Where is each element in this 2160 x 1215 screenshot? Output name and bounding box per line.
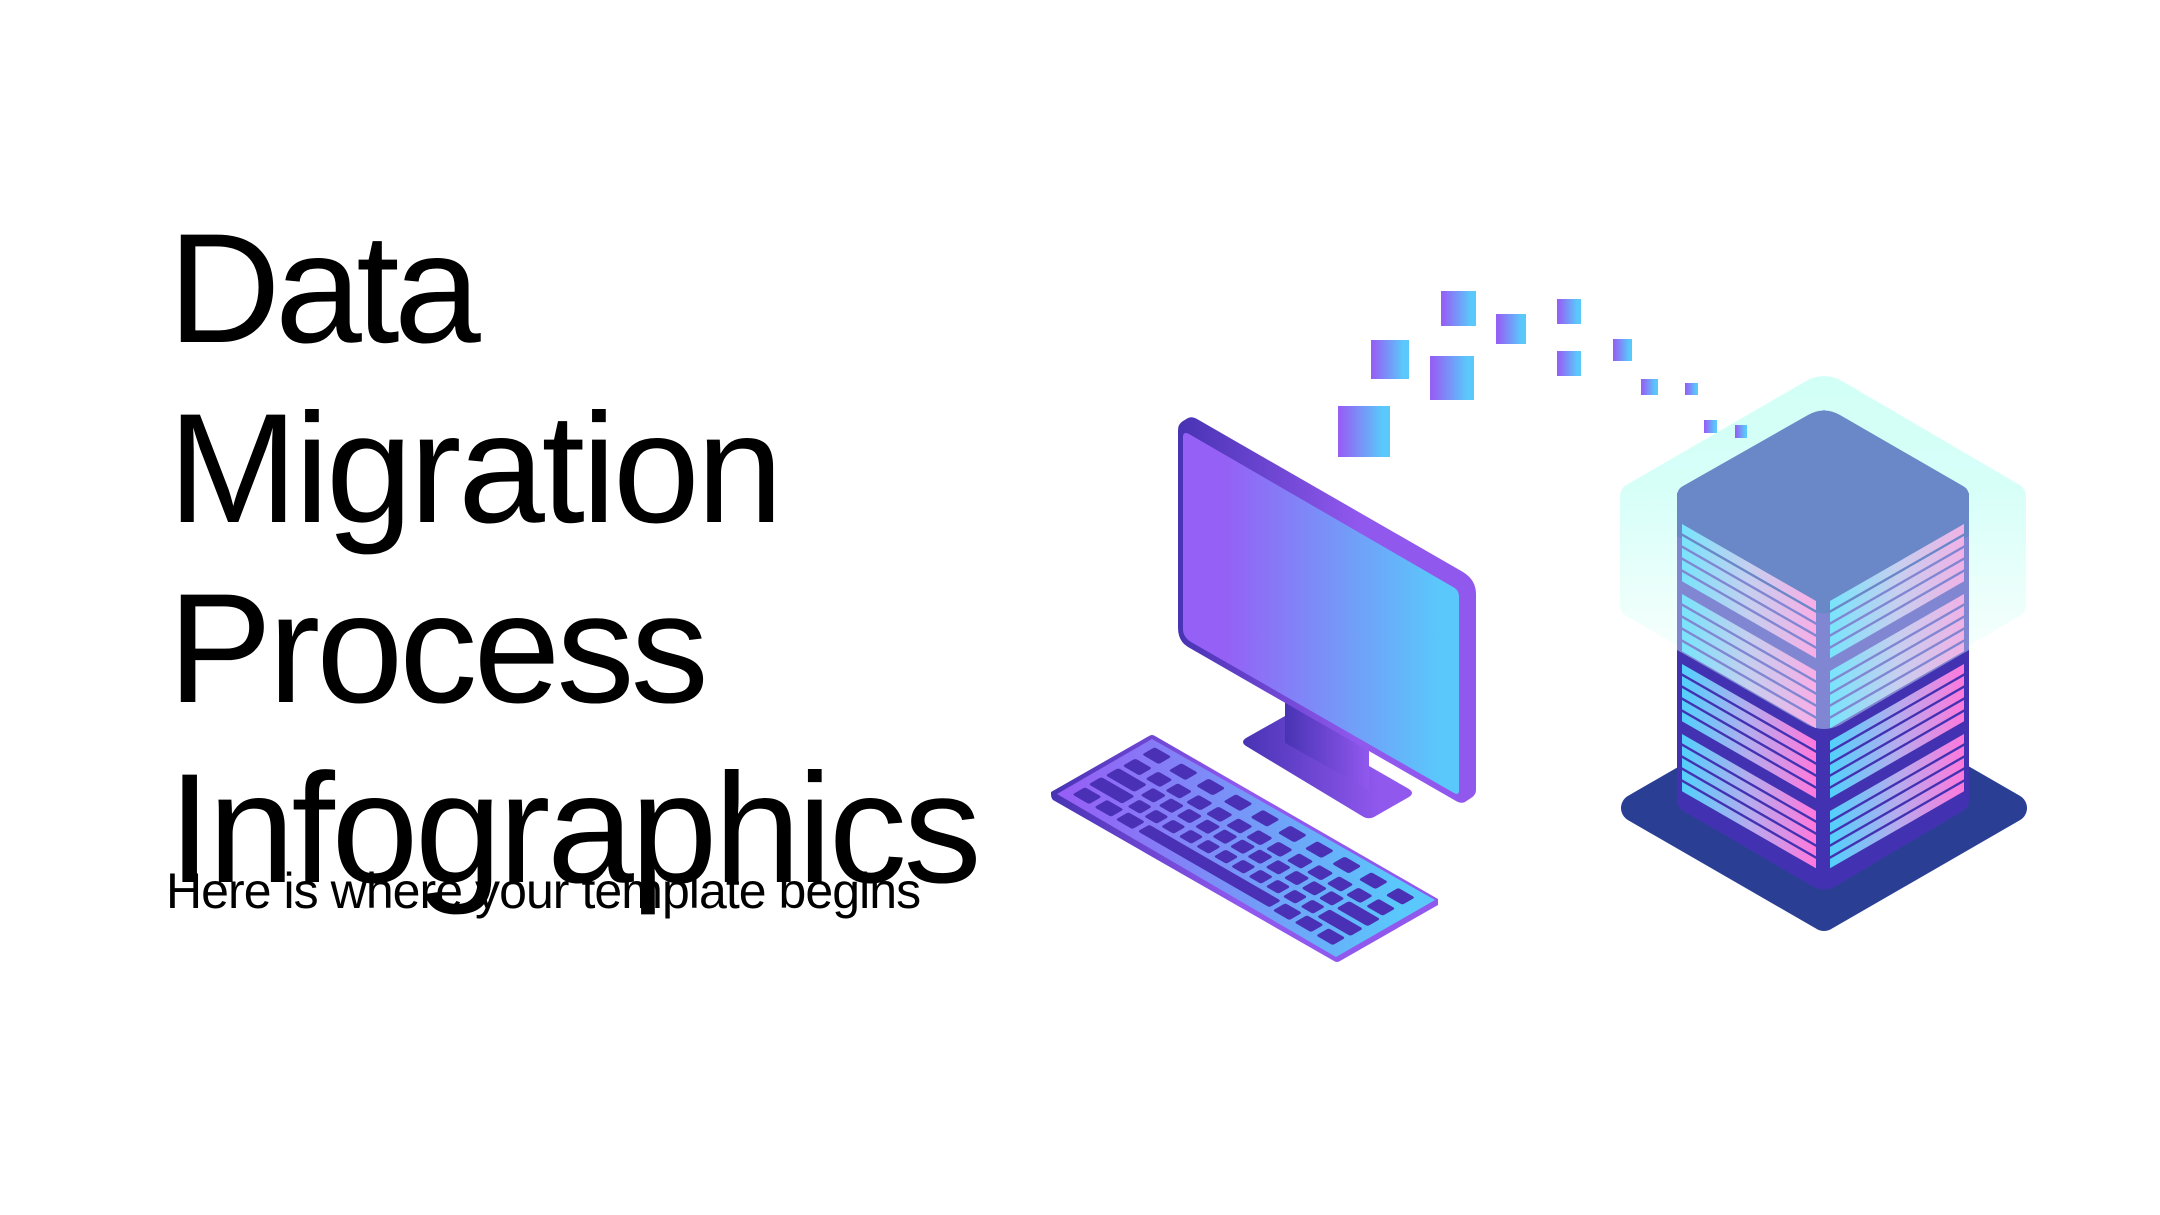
title: Infographics	[168, 742, 978, 916]
monitor frame	[1178, 417, 1476, 803]
title: Migration	[168, 382, 780, 556]
icon: keyboard	[1051, 735, 1438, 962]
server right lower stripes	[1830, 664, 1964, 868]
icon: server tower	[1620, 376, 2026, 917]
server top face	[1677, 410, 1969, 614]
keyboard top surface	[1057, 739, 1435, 957]
monitor stand base	[1243, 716, 1412, 818]
server right upper stripes	[1830, 524, 1964, 728]
icon: computer monitor	[1178, 417, 1476, 818]
server glow hexagon	[1620, 376, 2026, 730]
title	[168, 202, 978, 916]
title: Data	[168, 202, 475, 376]
title: Process	[168, 562, 705, 736]
server floor plate	[1635, 699, 2013, 917]
subtitle: Here is where your template begins	[166, 863, 920, 919]
keyboard keys	[1072, 747, 1415, 945]
monitor stand neck	[1285, 698, 1369, 790]
icon: migrating data squares	[1338, 291, 1747, 457]
server left lower stripes	[1682, 664, 1816, 868]
monitor screen	[1183, 433, 1459, 794]
server left upper stripes	[1682, 524, 1816, 728]
keyboard edge	[1051, 735, 1438, 962]
server body	[1677, 410, 1969, 890]
server body light overlay	[1677, 410, 1969, 729]
